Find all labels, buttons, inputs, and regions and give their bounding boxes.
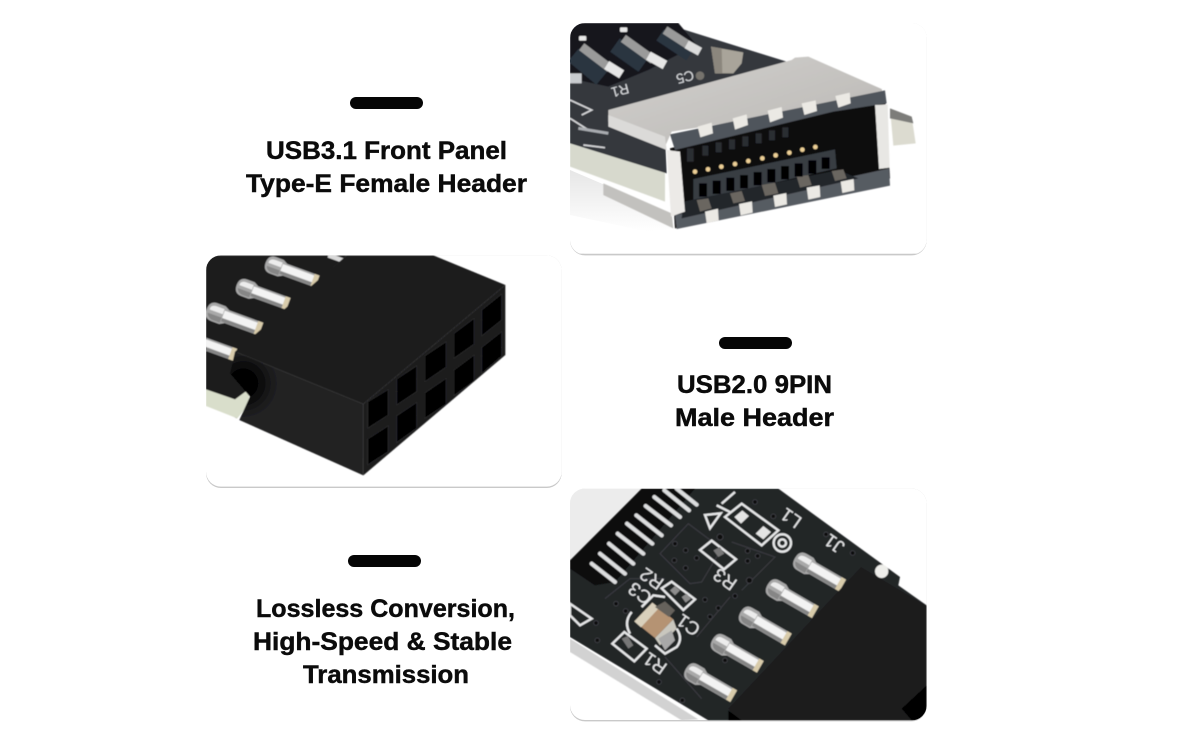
side shadow: [220, 360, 267, 407]
board shadow: [570, 170, 634, 212]
panel: circuit board and 9-pin header photo: [570, 489, 927, 721]
silkscreen labels: R3: [709, 564, 741, 595]
panel: 9-pin female socket photo: [180, 254, 562, 488]
heading text: High-Speed & Stable: [253, 628, 512, 656]
left connector shadow: [570, 489, 695, 585]
accent bar: [719, 337, 792, 349]
heading text: [246, 137, 527, 198]
gold contacts: [693, 145, 818, 174]
upper comb: [687, 127, 788, 162]
silkscreen labels: C1: [672, 610, 704, 641]
copper traces: [605, 524, 775, 699]
heading group: Lossless Conversion: [253, 555, 515, 689]
housing: [728, 567, 927, 720]
silkscreen label C5: C5: [674, 67, 696, 87]
sockets: [368, 294, 502, 465]
silkscreen labels: J1: [820, 530, 848, 558]
vias: [594, 500, 855, 703]
pins: [573, 30, 700, 78]
slots: [699, 157, 830, 197]
solder tab right: [890, 108, 916, 146]
heading text: Type-E Female Header: [246, 170, 527, 198]
board edge: [206, 388, 250, 418]
silkscreen label R1: R1: [609, 81, 631, 101]
silkscreen labels: R2: [636, 563, 667, 594]
component pads: [622, 510, 771, 649]
circuit board: [570, 489, 927, 720]
accent bar: [348, 555, 421, 567]
heading text: [253, 595, 515, 689]
accent bar: [350, 97, 423, 109]
solder dot: [875, 565, 888, 578]
metal shell: [608, 57, 885, 147]
backdrop shade: [570, 489, 645, 562]
top tabs: [698, 93, 851, 137]
housing front: [363, 285, 505, 475]
silkscreen labels: [624, 504, 848, 679]
housing top: [235, 255, 505, 404]
heading text: Lossless Conversion,: [256, 595, 515, 623]
pcb: [206, 255, 347, 418]
bottom tabs: [705, 179, 854, 223]
silkscreen labels: C3: [624, 578, 656, 609]
circuit board: [570, 23, 787, 173]
connector mouth: [670, 93, 890, 228]
housing side: [230, 352, 363, 475]
heading text: USB2.0 9PIN: [677, 371, 832, 399]
heading text: USB3.1 Front Panel: [266, 137, 507, 165]
heading group: USB2.0 9PIN Male Header: [675, 337, 834, 432]
silkscreen outlines: [570, 492, 791, 661]
fine pins: [592, 489, 697, 582]
contact feet: [697, 169, 847, 212]
socket opening: [902, 685, 927, 720]
pin headers: [681, 550, 847, 704]
shell side walls: [667, 150, 685, 217]
board edge: [570, 143, 665, 202]
capacitor: [634, 603, 673, 638]
board edge: [570, 639, 698, 720]
pins: [206, 255, 344, 362]
heading text: Male Header: [675, 404, 834, 432]
heading text: Transmission: [303, 661, 469, 689]
heading text: [675, 371, 834, 432]
silkscreen labels: R1: [639, 648, 671, 679]
panel: Type-E connector photo: [570, 23, 927, 255]
silkscreen labels: L1: [776, 504, 805, 533]
heading group: USB3.1 Front Panel Type-E Female Header: [246, 97, 527, 198]
silkscreen: [570, 100, 608, 148]
capacitor: [711, 47, 743, 73]
shell underside: [603, 183, 673, 228]
